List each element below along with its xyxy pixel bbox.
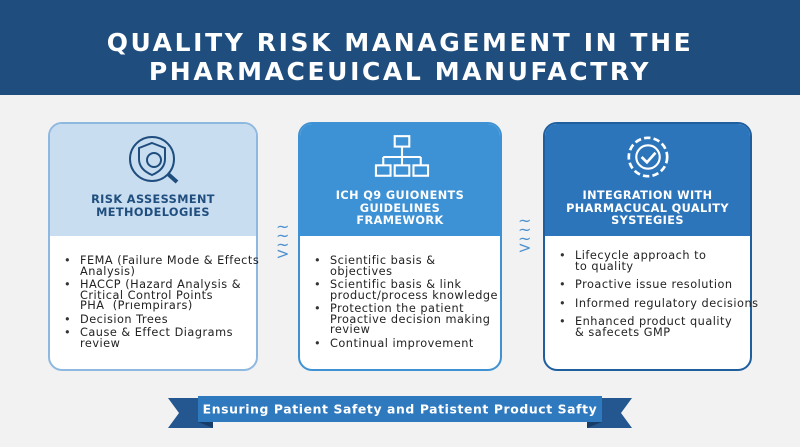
panel: risk assessment [48, 122, 258, 371]
list: Lifecycle approach to [575, 249, 706, 262]
arrow 1: ~ [276, 226, 289, 245]
arrow 2: ~ [518, 220, 531, 239]
arrow 2: ~ [518, 211, 531, 230]
panel header: ICH Q9 [300, 124, 500, 236]
heading: ICH Q9 GUIONENTS [336, 189, 464, 202]
list: product/process knowledge [330, 288, 498, 302]
list: review [80, 336, 120, 350]
list: review [330, 323, 370, 336]
heading: METHODELOGIES [96, 206, 210, 218]
arrow 1: ~ [276, 235, 289, 254]
list: FEMA (Failure Mode & Effects [80, 254, 259, 267]
list: objectives [330, 264, 392, 278]
arrow 1 [276, 217, 289, 263]
list: PHA (Prıempirars) [80, 299, 193, 312]
arrow 2: > [518, 238, 531, 257]
title: PHARMACEUICAL MANUFACTRY [149, 57, 651, 86]
heading [91, 193, 215, 218]
heading [566, 189, 729, 227]
panel: integration [543, 122, 752, 371]
ribbon banner [168, 396, 632, 428]
panel header: integration [545, 124, 750, 236]
list: & safecets GMP [575, 326, 671, 338]
icon: gear check [627, 136, 668, 178]
list: Decision Trees [80, 312, 168, 326]
heading: SYSTEGIES [611, 214, 684, 227]
list: Critical Control Points [80, 288, 213, 302]
list [560, 249, 758, 338]
arrow 2 [518, 211, 531, 257]
ribbon banner: Ensuring Patient Safety and Patistent Product Safty [203, 402, 597, 416]
list: Proactive issue resolution [575, 278, 733, 291]
heading: INTEGRATION WITH [582, 189, 713, 202]
heading: PHARMACUCAL QUALITY [566, 202, 729, 214]
panel header: risk assessment [50, 124, 256, 236]
list [66, 254, 259, 350]
list: Informed regulatory decisions [575, 296, 758, 310]
list: HACCP (Hazard Analysis & [80, 278, 241, 291]
panel: ICH Q9 [298, 122, 502, 371]
list: Proactive decision making [330, 312, 490, 326]
list: Analysis) [80, 264, 135, 278]
list: Scientific basis & [330, 254, 436, 267]
list: Cause & Effect Diagrams [80, 326, 233, 339]
list: Enhanced product quality [575, 315, 732, 328]
title: QUALITY RISK MANAGEMENT IN THE [107, 28, 693, 57]
arrow 2: ~ [518, 229, 531, 248]
icon: hierarchy [374, 135, 430, 177]
heading: RISK ASSESSMENT [91, 193, 215, 206]
list: Continual improvement [330, 336, 474, 350]
heading: GUIDELINES [360, 202, 440, 214]
list: Protection the patient [330, 302, 464, 315]
list [316, 254, 498, 350]
heading: FRAMEWORK [356, 214, 444, 227]
list: Scientific basis & link [330, 278, 462, 291]
arrow 1: > [276, 244, 289, 263]
arrow 1: ~ [276, 217, 289, 236]
icon: shield magnifier [129, 136, 178, 184]
list: to quality [575, 260, 634, 272]
heading [336, 189, 464, 227]
title [0, 0, 800, 95]
